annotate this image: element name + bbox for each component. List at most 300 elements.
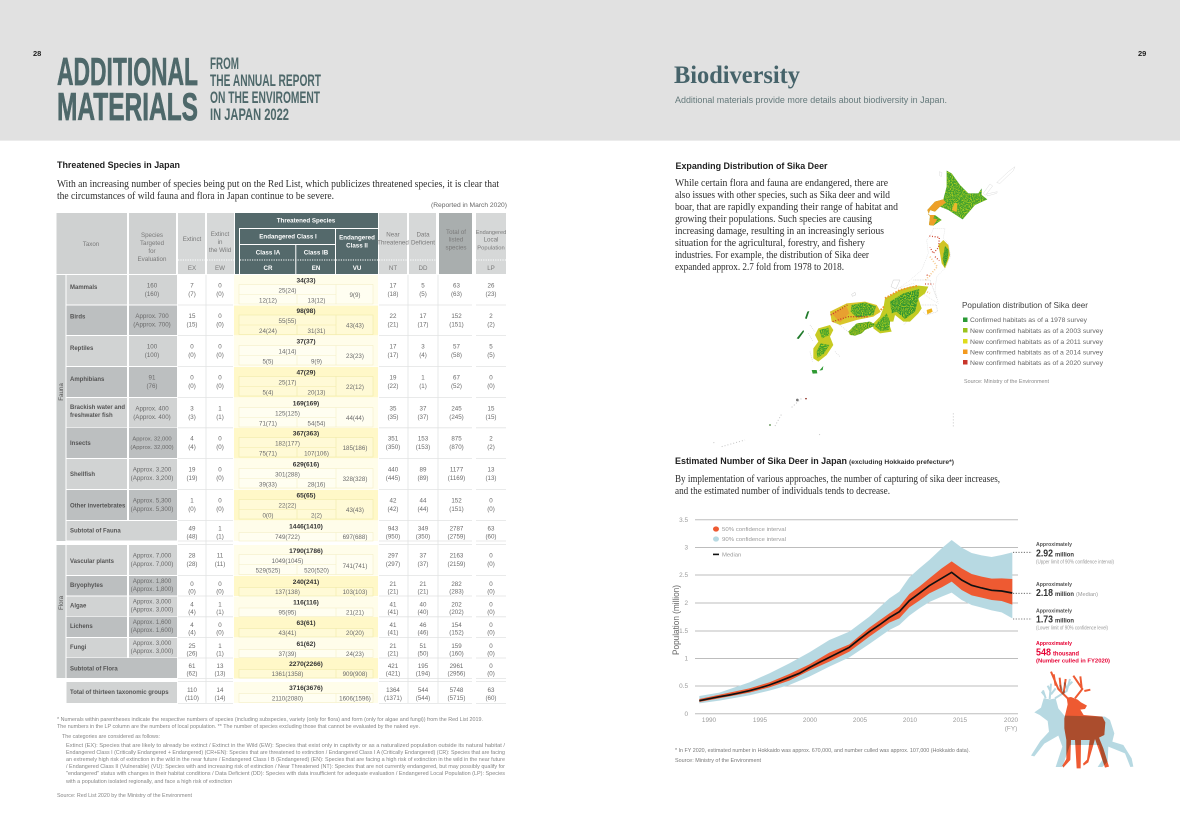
row: insects: 0 [218,436,222,442]
row: vascular plants: 37 [420,552,427,560]
footnote: hokkaido data: * In FY 2020, estimated number in Hokkaido was approx. 670,000, and number culled was approx. 107,000 (Hokkaido data). [675,748,970,754]
y axis labels: 2 [684,600,688,607]
row: amphibians: 91 [149,374,156,382]
chugoku [830,302,881,325]
row: vascular plants: Vascular plants [70,559,115,565]
fauna sidebar [56,275,66,541]
row: reptiles [66,336,495,366]
row: subtotal of flora: (0) [487,670,495,678]
row: birds: (17) [417,322,429,328]
row: shellfish: (13) [485,475,497,482]
body text: estimated number [675,474,1000,497]
footnotes: table: Source: Red List 2020 by the Ministry of the Environment [57,793,193,799]
row: fungi: (21) [387,650,399,658]
body text: expanding distribution: situation for the agricultural, forestry, and fishery [675,238,866,249]
row: shellfish: 440 [388,466,399,474]
icon: two deer [1031,672,1133,768]
row: amphibians: 0 [489,374,493,382]
row: reptiles: 3 [421,344,425,350]
row: bryophytes: 103(103) [343,589,367,596]
row: brackish water and freshwater fish: (Approx. 400) [133,414,171,421]
table header: Threatened [377,240,409,246]
chart legend [713,526,786,558]
row: fungi: 21 [390,643,397,650]
body text: expanding distribution: increasing damage, resulting in an increasingly serious [675,226,884,237]
row: algae: 202 [451,602,462,608]
heading: biodiversity: Biodiversity [674,62,800,89]
chart legend: 90% confidence interval [722,537,786,543]
row: mammals: Mammals [70,285,98,291]
row: vascular plants: 1049(1045) [272,558,303,565]
table header: Class II [346,242,368,250]
row: bryophytes [66,576,495,596]
table header: in [218,239,223,246]
flora sidebar: Flora [58,595,65,610]
row: fungi: (0) [487,650,495,658]
row: shellfish: (Approx. 3,200) [131,475,173,482]
map legend: Population distribution of Sika deer [962,300,1088,310]
callout: number culled: 548 [1036,646,1051,658]
row: insects: (153) [416,444,430,451]
body text: expanding distribution: growing their populations. Such species are causing [675,214,873,225]
section heading: estimated number: Estimated Number of Sika Deer in Japan [675,456,847,467]
body text: expanding distribution: expanded approx. 2.7 fold from 1978 to 2018. [675,262,844,273]
table header: the Wild [209,247,232,254]
row: fungi: 51 [420,643,427,650]
row: total of thirteen taxonomic groups: Total of thirteen taxonomic groups [70,690,169,696]
row: insects: 107(106) [304,450,329,458]
row: total of thirteen taxonomic groups: (5715) [448,695,465,702]
icon: orange deer [1051,672,1109,768]
row: subtotal of flora [66,658,495,678]
row: reptiles: 23(23) [346,353,364,360]
row: subtotal of flora: 61 [189,663,196,670]
row: insects: 875 [451,436,462,442]
row: brackish water and freshwater fish: (1) [216,414,224,421]
row: brackish water and freshwater fish: 44(44) [346,415,364,422]
row: birds: 43(43) [346,322,364,330]
row: total of thirteen taxonomic groups: (544) [416,695,430,702]
row: vascular plants: 1790(1786) [289,548,323,555]
row: bryophytes: (21) [417,588,429,596]
row: algae: 95(95) [279,610,296,616]
callout: upper limit: 2.92 [1036,548,1053,560]
row: subtotal of flora: (421) [386,670,400,678]
row: fungi: (50) [417,650,429,658]
row: subtotal of fauna: (48) [186,534,198,540]
row: mammals: (160) [145,291,159,298]
row: mammals: 7 [190,282,194,290]
row: mammals: 160 [147,282,158,290]
row: insects: 367(363) [293,430,319,438]
row: fungi: 37(39) [279,651,296,658]
row: bryophytes: 137(138) [275,589,300,596]
row: brackish water and freshwater fish: (245) [449,414,464,421]
callout: upper limit: (Upper limit of 90% confidence interval) [1036,560,1114,566]
row: lichens: (152) [449,630,464,636]
row: mammals: 25(24) [279,288,296,294]
callout: upper limit: million [1055,552,1074,558]
row: birds: 31(31) [308,328,325,335]
section heading: expanding distribution: Expanding Distribution of Sika Deer [676,161,828,172]
row: reptiles: (0) [188,352,196,359]
row: shellfish: (445) [386,475,400,482]
row: algae: (40) [417,609,429,616]
table header: listed [449,236,464,244]
row: bryophytes: (0) [188,588,196,596]
row: reptiles: 5 [489,344,493,350]
subtitle: from the annual report: FROM [210,55,239,73]
row: birds: (21) [387,322,399,328]
row: insects: 75(71) [259,450,277,458]
row: reptiles: 57 [453,344,460,350]
row: birds: (151) [449,322,464,328]
row: vascular plants: 520(520) [304,568,329,574]
table header: Endangered [476,230,506,236]
row: vascular plants: 529(525) [256,568,280,574]
map legend: New confirmed habitats as of a 2011 survey [970,339,1104,346]
row: subtotal of fauna: 1 [218,526,222,532]
row: fungi: 61(62) [296,641,316,648]
row: brackish water and freshwater fish: (37) [417,414,429,421]
table header: for [148,248,156,255]
row: other invertebrates: 0 [489,498,493,504]
row: subtotal of fauna: (2759) [448,534,465,540]
row: shellfish: 39(33) [259,482,277,488]
row: algae: 4 [190,602,194,608]
row: vascular plants: 11 [217,552,224,560]
section heading: estimated number [675,456,954,467]
row: bryophytes: 21 [390,581,397,588]
footnotes: table: Extinct (EX): Species that are likely to already be extinct / Extinct in the Wild (EW): Species that exist only in captivity or as a naturalized population outside its natural habitat / [66,743,506,749]
row: subtotal of flora: (194) [416,670,430,678]
row: lichens: (41) [387,630,399,636]
table header: VU [353,265,362,272]
row: reptiles: (58) [451,352,462,359]
row: algae: (4) [188,609,196,616]
row: brackish water and freshwater fish: 1 [218,406,222,412]
row: shellfish: (89) [417,475,429,482]
row: amphibians: 20(13) [308,390,325,396]
callout: number culled: thousand [1053,650,1079,658]
table header: Near [386,232,400,238]
row: subtotal of flora: Subtotal of Flora [70,666,118,672]
row: vascular plants: Approx. 7,000 [133,552,172,560]
footnotes: table: The categories are considered as follows: [62,734,160,740]
title: additional materials: MATERIALS [57,86,198,129]
table header: Species [141,232,163,239]
row: other invertebrates: 0(0) [262,512,274,520]
chart gridlines [695,520,1018,714]
row: amphibians: (22) [387,383,399,390]
footnotes: table: * Numerals within parentheses indicate the respective numbers of species (including subspecies, variety (only for flora) and form (only for algae and fungi)) from the Red List 2019. [57,717,483,723]
row: brackish water and freshwater fish: 245 [451,406,462,412]
row: amphibians: (0) [216,383,224,390]
row: subtotal of flora: 2961 [450,663,464,670]
row: total of thirteen taxonomic groups: (1371) [384,695,402,702]
row: subtotal of flora: 13 [217,663,224,670]
fauna sidebar: Fauna [58,383,65,401]
row: bryophytes: Bryophytes [70,583,104,589]
row: amphibians: 0 [218,374,222,382]
map legend [962,300,1104,367]
table header: NT [389,265,397,272]
row: other invertebrates: 42 [390,498,397,504]
row: lichens: 43(41) [279,630,296,637]
row: fungi: (Approx. 3,000) [131,648,173,655]
y axis labels: 2.5 [679,572,688,579]
row: lichens: Approx. 1,600 [133,619,172,626]
page number 29: 29 [1138,49,1146,58]
table header: Data [416,232,430,238]
row: algae: (Approx. 3,000) [131,606,173,614]
callout: lower limit: (Lower limit of 90% confidence level) [1036,626,1108,632]
table header: EW [215,265,225,272]
row: other invertebrates: 152 [451,498,462,504]
row: lichens: 4 [190,622,194,629]
row: lichens: 46 [420,622,427,629]
body text: estimated number: and the estimated number of individuals tends to decrease. [675,486,890,497]
y axis labels: 0.5 [679,683,688,690]
row: subtotal of fauna: 49 [189,526,196,532]
row: amphibians: (52) [451,383,462,390]
subtitle: from the annual report: IN JAPAN 2022 [210,106,289,124]
row: birds: 98(98) [296,308,316,315]
table header: LP [487,265,495,272]
row: brackish water and freshwater fish [66,398,497,428]
row: other invertebrates: (42) [387,506,399,513]
row: bryophytes: 21 [420,581,427,588]
row: insects: (350) [386,444,400,451]
row: vascular plants: (37) [417,561,429,568]
row: other invertebrates: (151) [449,506,464,513]
callout: lower limit: Approximately [1036,608,1073,614]
footnotes: table: The numbers in the LP column are the numbers of local population. ** The number of species excluding those that cannot be evaluated by the naked eye. [57,724,420,730]
section heading: threatened species: Threatened Species in Japan [57,160,180,171]
map: sika deer distribution in japan [713,167,1015,447]
row: subtotal of fauna: 2787 [450,526,464,532]
row: mammals: (7) [188,291,196,298]
row: reptiles: 14(14) [279,348,296,356]
heading: biodiversity [674,62,947,106]
row: shellfish: 629(616) [293,462,319,468]
row: shellfish: 0 [218,466,222,474]
row: reptiles: (4) [419,352,427,359]
row: subtotal of fauna: (950) [386,534,400,540]
row: birds: 24(24) [259,328,277,335]
row: brackish water and freshwater fish: 169(169) [293,400,319,408]
row: brackish water and freshwater fish: (35) [387,414,399,421]
row: lichens: (Approx. 1,600) [131,627,173,634]
row: shellfish: 19 [189,466,196,474]
row: total of thirteen taxonomic groups: 1606(1596) [339,696,371,702]
row: algae: 40 [420,602,427,608]
row: birds: 55(55) [279,318,296,325]
body text: expanding distribution: industries. For example, the distribution of Sika deer [675,250,869,261]
callout: number culled: Approximately [1036,641,1073,647]
footnotes: table: "endangered" status with changes in their habitat conditions / Data Deficient (DD): Species with data insufficient for adequate evaluation / Endangered Local Population (LP): Species [66,771,505,777]
title: additional materials: ADDITIONAL [57,51,198,94]
row: insects: (0) [216,444,224,451]
row: algae: 21(21) [346,610,364,616]
row: birds: (Approx. 700) [133,322,171,328]
row: total of thirteen taxonomic groups: 544 [418,687,429,694]
row: subtotal of fauna: 349 [418,526,429,532]
row: subtotal of fauna: (350) [416,534,430,540]
table header: CR [264,265,273,272]
table header: EX [188,265,196,272]
table header: Deficient [411,240,435,246]
table header: Extinct [183,236,202,243]
row: reptiles: 100 [147,344,158,350]
row: vascular plants: (0) [487,561,495,568]
row: other invertebrates [66,490,495,520]
map: tohoku outline [898,228,951,303]
row: insects: (2) [487,444,495,451]
row: mammals: 12(12) [259,298,277,304]
row: subtotal of flora: 421 [388,663,399,670]
row: fungi: 24(23) [346,651,364,658]
row: shellfish: (1169) [448,475,465,482]
confidence bands and median [699,540,1012,703]
page number 28: 28 [33,49,41,58]
body text: expanding distribution: While certain flora and fauna are endangered, there are [675,178,888,189]
row: other invertebrates: 65(65) [296,492,316,500]
callout: median: million [1055,591,1074,598]
title: additional materials [57,51,198,129]
x axis labels: 2005 [853,717,868,724]
row: algae [66,596,495,617]
callout: number culled: (Number culled in FY2020) [1036,658,1110,664]
row: lichens: (0) [487,630,495,636]
row: total of thirteen taxonomic groups: 5748 [450,687,464,694]
y axis labels: 3 [684,544,688,552]
row: reptiles: 9(9) [311,358,322,366]
chart source: Source: Ministry of the Environment [675,758,761,764]
row: brackish water and freshwater fish: Approx. 400 [135,406,169,412]
row: birds: 0 [218,313,222,320]
callout dotted leaders [1013,552,1032,619]
row: birds: Birds [70,314,86,320]
row: mammals: (23) [485,291,497,298]
row: bryophytes: (21) [387,588,399,596]
table header: Evaluation [138,256,167,263]
row: algae: 1 [218,602,222,608]
row: amphibians: (1) [419,383,427,390]
row: brackish water and freshwater fish: 37 [420,406,427,412]
x axis labels: 1990 [702,717,717,724]
row: total of thirteen taxonomic groups: 110 [187,687,197,694]
row: vascular plants [66,545,495,576]
table header: Extinct [211,231,230,238]
row: algae: 41 [390,602,397,608]
row: other invertebrates: (0) [487,506,495,513]
row: vascular plants: (11) [215,561,225,568]
intro text: threatened species [57,179,499,202]
row: birds: 2 [489,313,493,320]
row: bryophytes: 0 [190,581,194,588]
table header: Population [477,246,505,252]
row: reptiles: (0) [216,352,224,359]
row: reptiles: (5) [487,352,495,359]
table header: species [446,244,466,252]
row: total of thirteen taxonomic groups: 2110(2080) [272,696,303,702]
row: lichens: 0 [489,622,493,629]
row: brackish water and freshwater fish: 15 [488,406,495,412]
row: amphibians: 67 [453,374,460,382]
row: brackish water and freshwater fish: 125(125) [275,410,300,418]
x axis labels: 1995 [753,717,768,724]
row: total of thirteen taxonomic groups [66,682,497,703]
row: lichens: 41 [390,622,397,629]
row: subtotal of flora: 1361(1358) [272,671,303,678]
row: other invertebrates: (0) [216,506,224,513]
chart legend: 50% confidence interval [722,527,786,533]
table header: Class IA [256,250,281,256]
table header: EN [312,265,321,272]
callout: number culled [1036,641,1110,664]
row: shellfish [66,459,497,490]
row: mammals: 63 [453,282,460,290]
row: bryophytes: 282 [451,581,462,588]
callout: lower limit: 1.73 [1036,614,1053,626]
footnotes: table: / Endangered Class II (Vulnerable) (VU): Species with and increasing risk of extinction / Near Threatened (NT): Species that are not currently endangered, but may possibly qualify for [66,764,505,770]
row: birds: 17 [420,313,427,320]
row: other invertebrates: 44 [420,498,427,504]
x axis labels: 2015 [953,717,968,724]
row: mammals: 34(33) [296,278,316,284]
map: southern islands [713,366,953,447]
map: honshu, shikoku and kyushu [797,280,937,362]
y axis title: Population (million) [671,585,681,655]
report date note: (Reported in March 2020) [431,202,507,209]
row: vascular plants: 0 [489,552,493,560]
row: mammals: 5 [421,282,425,290]
subtitle: from the annual report [210,55,321,124]
row: lichens: (0) [216,630,224,636]
row: fungi: 25 [189,643,196,650]
row: mammals [66,275,497,304]
row: subtotal of flora: 195 [418,663,429,670]
row: algae: (0) [487,609,495,616]
kyushu [813,325,833,362]
row: amphibians: 47(29) [296,370,316,376]
row: vascular plants: (2159) [448,561,465,568]
row: subtotal of fauna: 749(722) [275,534,300,541]
body text: expanding distribution: also issues with other species, such as Sika deer and wild [675,190,891,201]
row: total of thirteen taxonomic groups: (60) [485,695,497,702]
row: subtotal of flora: (13) [214,670,226,678]
row: reptiles: 17 [390,344,397,350]
callout: lower limit: million [1055,618,1074,624]
footnotes: table: Endangered Class I (Critically Endangered + Endangered) (CR+EN): Species that are threatened to extinction / Endangered Class I A (Critically Endangered) (CR): Species that are facing [66,750,505,756]
row: insects: (870) [449,444,464,451]
row: lichens: 20(20) [346,630,364,637]
table header: Taxon [83,241,100,248]
row: birds: 22 [390,313,397,320]
row: lichens: 154 [451,622,462,629]
row: bryophytes: 240(241) [293,579,319,586]
x axis labels: 2020 [1004,717,1019,724]
table header: Threatened Species [277,218,336,224]
row: algae: (1) [216,609,224,616]
central honshu [873,286,928,333]
table header: Total of [446,229,466,236]
row: reptiles: 37(37) [296,338,316,346]
row: amphibians: 25(17) [279,380,296,386]
row: amphibians: 19 [390,374,397,382]
row: other invertebrates: Other invertebrates [70,504,126,510]
